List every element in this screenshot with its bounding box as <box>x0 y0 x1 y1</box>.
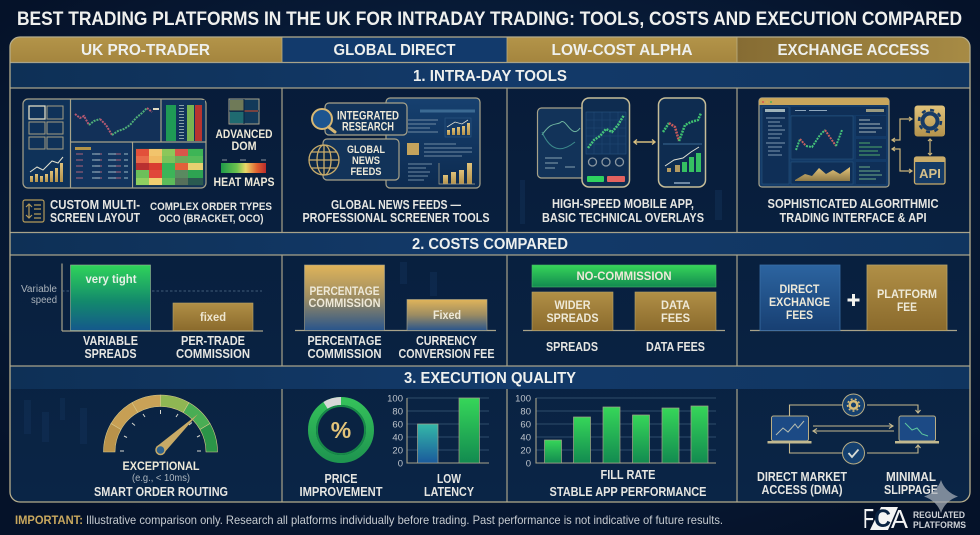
legend: heat gradient <box>221 160 266 173</box>
FCA logo: C <box>874 505 891 533</box>
label: minimal slippage: SLIPPAGE <box>884 483 938 497</box>
bar: data fees: DATA <box>661 298 690 312</box>
callout: integrated research: INTEGRATED <box>337 110 399 122</box>
icon: advanced DOM <box>229 99 259 124</box>
callout: integrated research: RESEARCH <box>342 122 394 134</box>
panel: Global Direct costs <box>295 265 496 361</box>
label: minimal slippage: MINIMAL <box>886 470 936 484</box>
arrow: double-headed <box>634 140 655 144</box>
panel: Exchange Access execution <box>757 394 939 497</box>
bar: data fees <box>635 292 716 330</box>
chart: fill rate: 100 <box>515 394 531 404</box>
axis label: variable speed: Variable <box>21 284 57 295</box>
label: complex order types <box>150 201 272 225</box>
section heading: execution quality: 3. EXECUTION QUALITY <box>404 370 577 387</box>
icon: destination laptop <box>895 416 939 444</box>
label: screener tools: PROFESSIONAL SCREENER TOOLS <box>302 211 490 225</box>
tab: UK Pro-Trader: UK PRO-TRADER <box>81 42 210 59</box>
label: custom multi-screen layout <box>50 198 140 225</box>
label: direct market access: DIRECT MARKET <box>757 470 847 484</box>
label: algorithmic interface: SOPHISTICATED ALGORITHMIC <box>768 197 938 211</box>
section heading: intra-day tools <box>10 62 970 88</box>
label: algorithmic interface: TRADING INTERFACE & API <box>780 211 926 225</box>
label: data fees: DATA FEES <box>646 340 705 354</box>
label: variable spreads: VARIABLE <box>83 334 138 348</box>
label: currency conversion fee: CURRENCY <box>416 334 478 348</box>
label: low latency: LATENCY <box>424 485 475 499</box>
bar: fixed conversion fee: Fixed <box>433 308 461 322</box>
panel: UK Pro-Trader tools <box>23 99 274 225</box>
label: regulated platforms <box>913 510 966 531</box>
label: heat maps: HEAT MAPS <box>214 175 274 189</box>
label: per-trade commission: PER-TRADE <box>181 334 245 348</box>
label: regulated platforms: REGULATED <box>913 510 965 521</box>
section heading: intra-day tools: 1. INTRA-DAY TOOLS <box>413 68 567 85</box>
chart: low latency: 20 <box>392 446 403 456</box>
label: minimal slippage <box>884 470 938 497</box>
label: per-trade commission: COMMISSION <box>176 347 250 361</box>
icon: magnifier <box>312 109 335 132</box>
FCA logo <box>863 503 909 534</box>
label: algorithmic interface <box>768 197 938 225</box>
panel: UK Pro-Trader costs <box>21 264 263 361</box>
chart: fill rate: 60 <box>520 420 531 430</box>
label: custom multi-screen layout: SCREEN LAYOUT <box>50 211 140 225</box>
icon: gear node <box>842 394 864 416</box>
icon: source laptop <box>768 416 812 444</box>
icon: API box: API <box>919 166 941 181</box>
bar: platform fee <box>867 265 947 330</box>
label: percentage commission: PERCENTAGE <box>308 334 382 348</box>
phone: chart and growth bars <box>658 98 706 187</box>
label: currency conversion fee <box>398 334 494 361</box>
algo trading window <box>759 98 889 187</box>
label: smart order routing: SMART ORDER ROUTING <box>94 485 228 499</box>
label: spreads: SPREADS <box>546 340 598 354</box>
label: DOM: DOM <box>232 139 256 153</box>
chart: fill rate: 40 <box>520 432 531 444</box>
tab: UK Pro-Trader <box>10 37 282 62</box>
tab: Global Direct: GLOBAL DIRECT <box>334 42 456 59</box>
tab: Exchange Access: EXCHANGE ACCESS <box>778 42 930 59</box>
label: advanced: ADVANCED <box>216 127 273 141</box>
chart: fill rate: 0 <box>526 458 531 470</box>
bar: direct exchange fees: DIRECT <box>780 282 820 296</box>
label: mobile app: BASIC TECHNICAL OVERLAYS <box>542 211 704 225</box>
bar: fixed conversion fee <box>407 300 487 330</box>
label: complex order types: COMPLEX ORDER TYPES <box>150 201 272 213</box>
callout: global news feeds <box>323 139 399 180</box>
label: mobile app <box>542 197 704 225</box>
tab: Global Direct <box>282 37 507 62</box>
bar: percentage commission: PERCENTAGE <box>310 284 380 298</box>
section heading: costs compared <box>10 232 970 255</box>
label: regulated platforms: PLATFORMS <box>913 520 966 531</box>
chart: low latency: 60 <box>392 420 403 430</box>
label: price improvement: IMPROVEMENT <box>300 485 383 499</box>
label: currency conversion fee: CONVERSION FEE <box>398 347 494 361</box>
bar: no commission <box>532 265 716 287</box>
bar: percentage commission: COMMISSION <box>308 296 380 310</box>
icon: gear box <box>914 106 945 136</box>
bar: no commission: NO-COMMISSION <box>576 269 672 283</box>
label: direct market access: ACCESS (DMA) <box>762 483 842 497</box>
label: complex order types: OCO (BRACKET, OCO) <box>158 213 264 225</box>
chart: fill rate: 20 <box>520 446 531 456</box>
bar: fixed: fixed <box>200 312 226 324</box>
label: per-trade commission <box>176 334 250 361</box>
label: fill rate: FILL RATE <box>600 468 656 482</box>
panel: Global Direct tools <box>302 98 490 225</box>
panel: Global Direct execution <box>300 394 489 499</box>
label: screener tools <box>302 198 490 225</box>
bar: fixed <box>173 303 253 330</box>
label: mobile app: HIGH-SPEED MOBILE APP, <box>552 197 694 211</box>
phone: app with order buttons <box>582 98 630 187</box>
icon: API box <box>914 157 945 184</box>
callout: global news feeds: NEWS <box>352 155 380 167</box>
decorative sparkle <box>924 480 958 513</box>
chart: fill rate: 80 <box>520 406 531 418</box>
bar: wider spreads <box>532 292 613 330</box>
axis label: variable speed: speed <box>31 295 57 306</box>
footer disclaimer: IMPORTANT: Illustrative comparison only. Research all platforms individually before trading. Past performance is not indicative of future results. <box>15 513 723 527</box>
panel: Low-Cost Alpha execution <box>515 394 716 499</box>
bar: percentage commission <box>304 265 384 330</box>
icon: globe <box>309 145 339 175</box>
platform header tabs <box>10 37 970 62</box>
chart: fill rate <box>515 394 716 470</box>
heat map grid <box>135 148 204 186</box>
tab: Exchange Access <box>737 37 970 62</box>
label: price improvement <box>300 472 383 499</box>
label: exceptional: EXCEPTIONAL <box>122 459 200 473</box>
arrows: order routing <box>790 405 920 453</box>
bar: platform fee: PLATFORM <box>877 287 937 301</box>
icon: layout sliders <box>23 200 44 222</box>
tab: Low-Cost Alpha: LOW-COST ALPHA <box>552 42 692 59</box>
label: stable app performance: STABLE APP PERFORMANCE <box>550 485 706 499</box>
gauge <box>103 395 218 454</box>
tablet <box>538 108 588 178</box>
label: percentage commission: COMMISSION <box>308 347 382 361</box>
chart: low latency: 100 <box>387 394 403 404</box>
callout: global news feeds: GLOBAL <box>347 144 385 156</box>
bar: very tight: very tight <box>86 274 137 286</box>
chart: low latency: 40 <box>392 432 403 444</box>
FCA logo: A <box>891 504 909 534</box>
panel: Exchange Access costs <box>750 265 957 330</box>
donut: price improvement: % <box>331 417 351 443</box>
arrows: API links <box>892 117 932 173</box>
label: direct market access <box>757 470 847 497</box>
chart: low latency: 80 <box>392 406 403 418</box>
bar: platform fee: FEE <box>897 300 917 314</box>
callout: integrated research <box>325 103 407 135</box>
label: screener tools: GLOBAL NEWS FEEDS — <box>331 198 461 212</box>
label: example latency: (e.g., < 10ms) <box>132 472 190 484</box>
bar: wider spreads: SPREADS <box>546 311 598 325</box>
label: low latency <box>424 472 475 499</box>
label: price improvement: PRICE <box>324 472 358 486</box>
icon: plus <box>848 294 860 306</box>
callout: global news feeds: FEEDS <box>350 166 382 178</box>
panel: Exchange Access tools <box>759 98 945 225</box>
section heading: execution quality <box>10 366 970 389</box>
axis label: variable speed <box>21 284 57 306</box>
panel: UK Pro-Trader execution <box>94 395 228 499</box>
icon: check node <box>842 442 864 464</box>
section heading: costs compared: 2. COSTS COMPARED <box>412 236 568 253</box>
multi-screen dashboard <box>23 99 206 188</box>
label: variable spreads <box>83 334 138 361</box>
chart: low latency: 0 <box>398 458 403 470</box>
bar: very tight <box>70 265 150 330</box>
bar: data fees: FEES <box>661 311 690 325</box>
label: percentage commission <box>308 334 382 361</box>
panel: Low-Cost Alpha tools <box>538 98 706 225</box>
bar: direct exchange fees: FEES <box>786 308 813 322</box>
panel: Low-Cost Alpha costs <box>523 265 725 354</box>
donut: price improvement <box>312 401 370 459</box>
label: variable spreads: SPREADS <box>84 347 136 361</box>
bar: wider spreads: WIDER <box>554 298 591 312</box>
label: low latency: LOW <box>437 472 461 486</box>
tab: Low-Cost Alpha <box>507 37 737 62</box>
FCA logo: F <box>863 503 874 534</box>
bar: direct exchange fees <box>760 265 840 330</box>
bar: direct exchange fees: EXCHANGE <box>769 295 830 309</box>
screener screen <box>386 98 480 188</box>
label: custom multi-screen layout: CUSTOM MULTI- <box>50 198 140 212</box>
chart: low latency <box>387 394 489 470</box>
